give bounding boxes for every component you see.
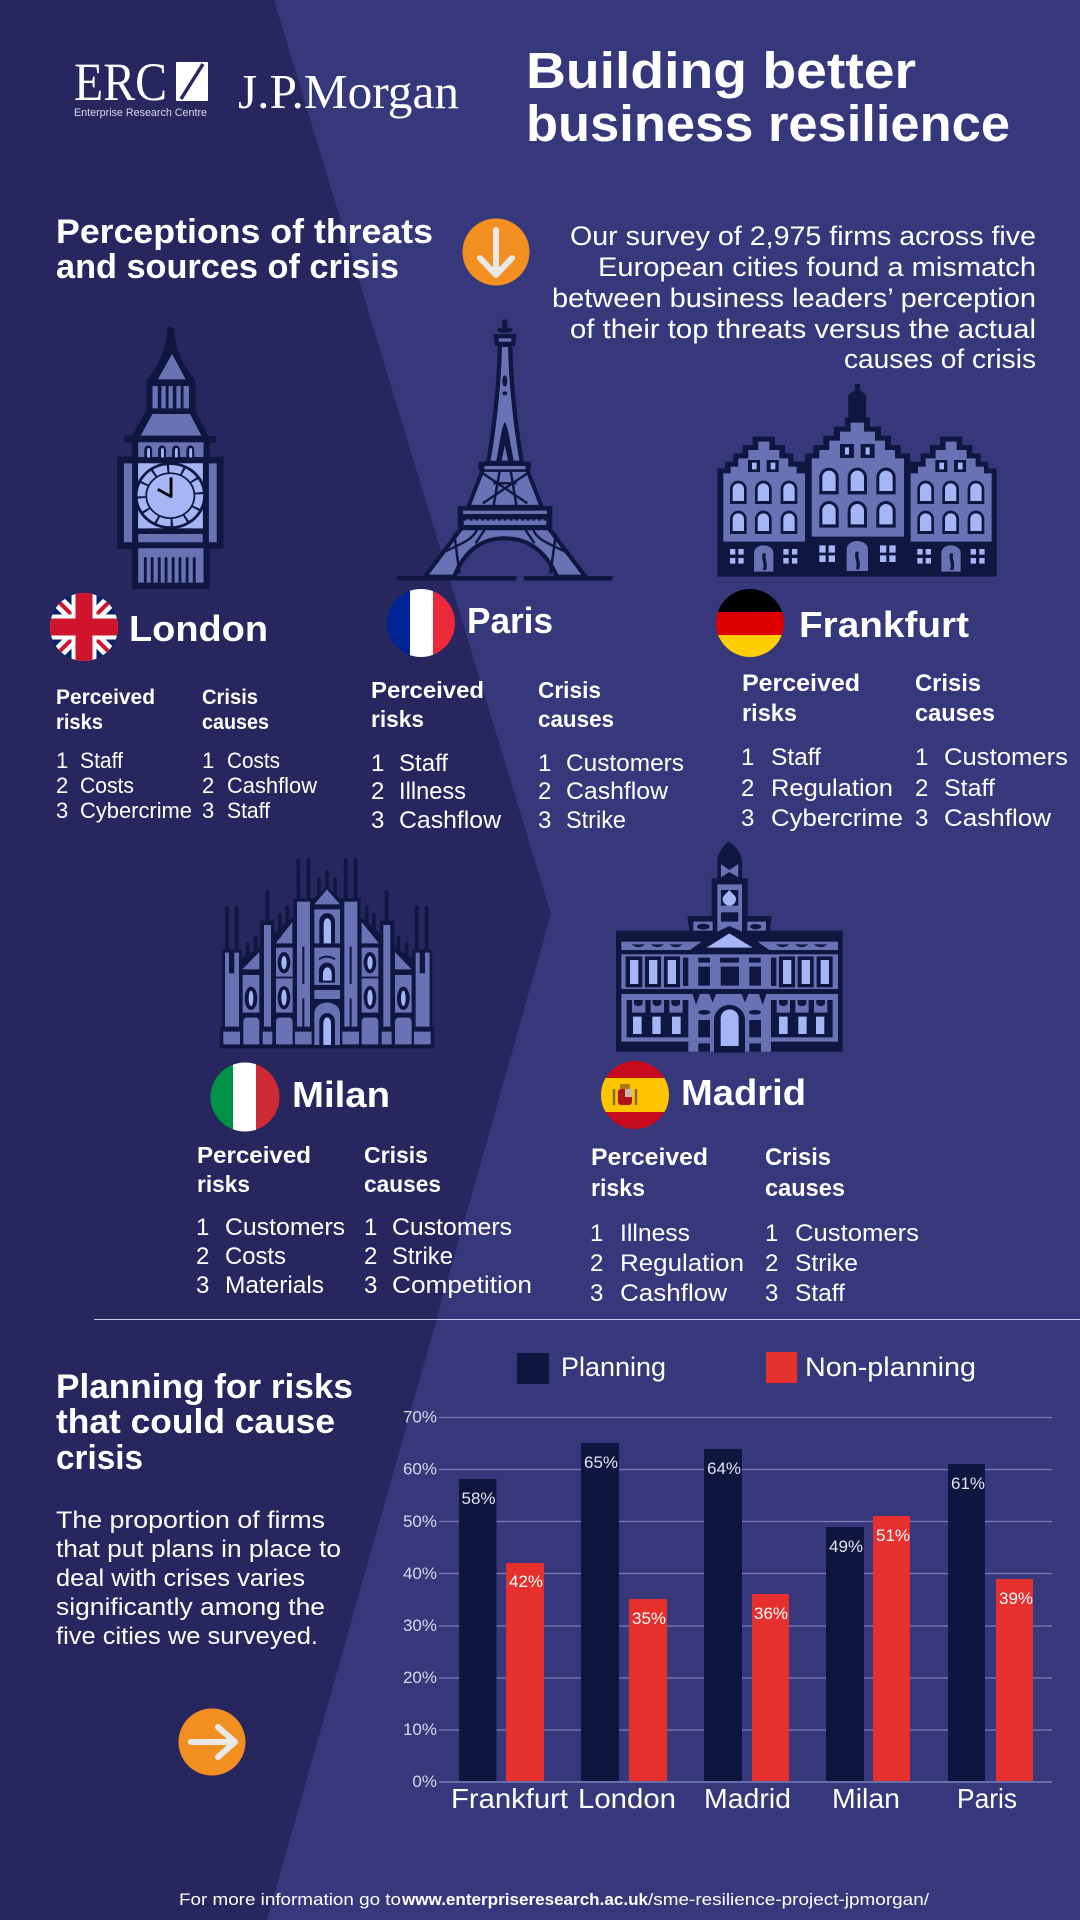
heading: perceived risks: Perceived: [56, 686, 155, 709]
list: crisis causes: 2: [364, 1243, 377, 1270]
panel: Paris: [371, 589, 684, 834]
list: crisis causes: 2: [915, 775, 928, 802]
city name: Madrid: Madrid: [681, 1072, 806, 1113]
survey intro text: Our survey of 2,975 firms across five: [570, 221, 1036, 251]
list: perceived risks: 2: [590, 1250, 603, 1277]
heading: perceptions of threats: [56, 213, 433, 286]
list: perceived risks: Regulation: [620, 1250, 744, 1277]
heading: crisis causes: Crisis: [202, 686, 258, 709]
heading: planning for risks: crisis: [56, 1439, 143, 1477]
list: crisis causes: 3: [915, 805, 928, 832]
list: perceived risks: 3: [371, 807, 384, 834]
heading: crisis causes: causes: [915, 700, 995, 727]
heading: crisis causes: causes: [364, 1171, 441, 1197]
planning description text: deal with crises varies: [56, 1565, 305, 1592]
list: crisis causes: 3: [364, 1272, 377, 1299]
panel: London: [50, 593, 317, 823]
heading: perceptions of threats: Perceptions of threats: [56, 213, 433, 251]
panel: Frankfurt: [716, 589, 1068, 832]
city name: Frankfurt: Frankfurt: [799, 604, 969, 645]
bars: London: 35%: [632, 1609, 666, 1628]
list: perceived risks: Cashflow: [620, 1280, 728, 1307]
dark chevron background panel: [0, 0, 551, 1920]
bars: Paris: 39%: [999, 1589, 1033, 1608]
list: crisis causes: Costs: [227, 748, 280, 773]
axis labels: 10%: [403, 1720, 437, 1739]
bars: Frankfurt: 58%: [461, 1489, 496, 1508]
list: crisis causes: [538, 750, 684, 834]
list: crisis causes: Customers: [944, 744, 1068, 771]
bars: London: [581, 1443, 667, 1781]
list: perceived risks: Staff: [771, 744, 821, 771]
list: crisis causes: Staff: [944, 775, 995, 802]
heading: crisis causes: Crisis: [765, 1144, 831, 1171]
bars: Milan: 49%: [829, 1537, 863, 1556]
heading: crisis causes: Crisis: [364, 1142, 428, 1168]
axis labels: 0%: [412, 1772, 437, 1791]
heading: planning for risks: [56, 1368, 353, 1477]
heading: planning for risks: that could cause: [56, 1403, 335, 1441]
list: crisis causes: Strike: [566, 807, 626, 834]
list: crisis causes: 1: [765, 1220, 778, 1247]
axis labels: 40%: [403, 1564, 437, 1583]
list: crisis causes: Cashflow: [944, 805, 1052, 832]
list: perceived risks: Cybercrime: [771, 805, 903, 832]
legend: Non-planning: [805, 1352, 976, 1382]
list: perceived risks: Costs: [80, 773, 134, 798]
list: perceived risks: 2: [196, 1243, 209, 1270]
bar chart: [403, 1408, 1052, 1814]
city axis labels: Paris: [957, 1783, 1017, 1814]
list: crisis causes: Strike: [795, 1250, 858, 1277]
icon: Eiffel Tower: [397, 319, 613, 581]
heading: crisis causes: Crisis: [915, 670, 981, 697]
heading: crisis causes: causes: [538, 706, 614, 732]
title: [526, 42, 1010, 152]
list: perceived risks: 1: [371, 750, 384, 777]
list: crisis causes: Staff: [795, 1280, 845, 1307]
heading: crisis causes: [202, 686, 269, 734]
planning description text: five cities we surveyed.: [56, 1623, 318, 1650]
list: perceived risks: Staff: [80, 748, 124, 773]
bars: Frankfurt: [459, 1479, 544, 1781]
logo: ERC: Enterprise Research Centre: [74, 107, 207, 119]
list: crisis causes: 2: [538, 778, 551, 805]
bars: Madrid: 64%: [707, 1459, 741, 1478]
bars: Milan: [826, 1516, 910, 1781]
list: crisis causes: Customers: [566, 750, 684, 777]
heading: crisis causes: [765, 1144, 845, 1202]
city axis labels: London: [578, 1783, 676, 1814]
heading: planning for risks: Planning for risks: [56, 1368, 353, 1406]
list: perceived risks: 1: [590, 1220, 603, 1247]
city axis labels: [451, 1783, 1017, 1814]
bars: London: 65%: [584, 1453, 618, 1472]
survey intro text: European cities found a mismatch: [598, 252, 1036, 282]
footer: [179, 1890, 929, 1909]
footer: www.enterpriseresearch.ac.uk: [401, 1890, 649, 1909]
heading: perceived risks: risks: [742, 700, 797, 727]
planning description text: [56, 1507, 341, 1650]
heading: perceived risks: risks: [371, 706, 424, 732]
footer: For more information go to: [179, 1890, 401, 1909]
planning description text: that put plans in place to: [56, 1536, 341, 1563]
list: perceived risks: 1: [741, 744, 754, 771]
flag: France: [387, 589, 456, 657]
heading: perceived risks: [371, 677, 484, 732]
list: perceived risks: [590, 1220, 744, 1307]
heading: perceived risks: risks: [197, 1171, 250, 1197]
list: perceived risks: 1: [56, 748, 68, 773]
list: crisis causes: 1: [538, 750, 551, 777]
list: perceived risks: 3: [741, 805, 754, 832]
heading: crisis causes: [915, 670, 995, 727]
list: crisis causes: 3: [538, 807, 551, 834]
list: perceived risks: Cashflow: [399, 807, 502, 834]
list: crisis causes: 1: [915, 744, 928, 771]
list: perceived risks: 1: [196, 1214, 209, 1241]
survey intro text: [552, 221, 1036, 374]
city name: Paris: Paris: [467, 600, 553, 641]
list: perceived risks: Costs: [225, 1243, 286, 1270]
axis labels: 20%: [403, 1668, 437, 1687]
heading: perceived risks: risks: [591, 1175, 645, 1202]
list: crisis causes: Cashflow: [566, 778, 669, 805]
list: crisis causes: 2: [202, 773, 214, 798]
heading: perceived risks: [591, 1144, 708, 1202]
heading: crisis causes: [364, 1142, 441, 1197]
city axis labels: Madrid: [704, 1783, 791, 1814]
survey intro text: causes of crisis: [844, 344, 1036, 374]
list: perceived risks: 2: [371, 778, 384, 805]
icon: Madrid city hall: [616, 842, 843, 1053]
list: perceived risks: 2: [56, 773, 68, 798]
heading: perceived risks: [197, 1142, 311, 1197]
icon: down arrow: [462, 218, 530, 286]
heading: perceived risks: [56, 686, 155, 734]
heading: crisis causes: causes: [765, 1175, 845, 1202]
axis labels: 50%: [403, 1512, 437, 1531]
heading: perceived risks: Perceived: [591, 1144, 708, 1171]
axis labels: 30%: [403, 1616, 437, 1635]
bars: Madrid: 36%: [754, 1604, 788, 1623]
list: perceived risks: [56, 748, 192, 823]
heading: crisis causes: Crisis: [538, 677, 601, 703]
list: crisis causes: 3: [202, 798, 214, 823]
list: perceived risks: 3: [196, 1272, 209, 1299]
list: perceived risks: Cybercrime: [80, 798, 192, 823]
heading: crisis causes: causes: [202, 711, 269, 734]
list: perceived risks: 3: [590, 1280, 603, 1307]
heading: perceptions of threats: and sources of crisis: [56, 248, 399, 286]
list: crisis causes: 2: [765, 1250, 778, 1277]
list: perceived risks: Illness: [399, 778, 466, 805]
panel: Madrid: [590, 1061, 919, 1307]
flag: United Kingdom: [50, 593, 118, 661]
icon: Milan cathedral: [220, 860, 434, 1048]
list: crisis causes: [364, 1214, 532, 1299]
list: perceived risks: Staff: [399, 750, 448, 777]
icon: Frankfurt Romer: [717, 384, 997, 577]
list: crisis causes: [202, 748, 317, 823]
city name: London: London: [129, 608, 268, 649]
heading: perceived risks: Perceived: [197, 1142, 311, 1168]
bars: Madrid: [704, 1449, 789, 1781]
bars: Milan: 51%: [876, 1526, 910, 1545]
city axis labels: Frankfurt: [451, 1783, 568, 1814]
list: perceived risks: 2: [741, 775, 754, 802]
list: perceived risks: [741, 744, 903, 832]
city axis labels: Milan: [832, 1783, 900, 1814]
list: crisis causes: Cashflow: [227, 773, 317, 798]
icon: right arrow: [178, 1708, 246, 1776]
planning description text: The proportion of firms: [56, 1507, 325, 1534]
list: crisis causes: 3: [765, 1280, 778, 1307]
logo: J.P.Morgan: J.P.Morgan: [238, 64, 459, 119]
heading: perceived risks: Perceived: [371, 677, 484, 703]
heading: perceived risks: Perceived: [742, 670, 860, 697]
list: perceived risks: 3: [56, 798, 68, 823]
flag: Italy: [210, 1062, 280, 1132]
list: crisis causes: Strike: [392, 1243, 453, 1270]
axis labels: [403, 1408, 437, 1791]
list: perceived risks: Materials: [225, 1272, 324, 1299]
title: business resilience: [526, 95, 1010, 152]
list: perceived risks: Regulation: [771, 775, 893, 802]
list: perceived risks: Illness: [620, 1220, 690, 1247]
planning description text: significantly among the: [56, 1594, 325, 1621]
list: crisis causes: Competition: [392, 1272, 532, 1299]
title: Building better: [526, 42, 916, 99]
list: crisis causes: Staff: [227, 798, 271, 823]
logo: ERC: ERC: [74, 52, 167, 112]
list: crisis causes: [915, 744, 1068, 832]
axis labels: 60%: [403, 1460, 437, 1478]
list: crisis causes: Customers: [795, 1220, 919, 1247]
list: perceived risks: Customers: [225, 1214, 345, 1241]
list: crisis causes: 1: [202, 748, 214, 773]
survey intro text: of their top threats versus the actual: [570, 314, 1036, 344]
heading: perceived risks: [742, 670, 860, 727]
flag: Spain: [601, 1061, 669, 1129]
survey intro text: between business leaders’ perception: [552, 283, 1036, 313]
list: perceived risks: [371, 750, 502, 834]
heading: crisis causes: [538, 677, 614, 732]
bars: Frankfurt: 42%: [509, 1572, 543, 1591]
flag: Germany: [716, 589, 784, 658]
bars: Paris: [948, 1464, 1033, 1781]
axis labels: 70%: [403, 1408, 437, 1426]
list: crisis causes: [765, 1220, 919, 1307]
icon: Big Ben: [118, 327, 223, 588]
heading: perceived risks: risks: [56, 711, 103, 734]
list: crisis causes: 1: [364, 1214, 377, 1241]
legend: Planning: [561, 1352, 666, 1382]
legend: [517, 1352, 976, 1384]
list: crisis causes: Customers: [392, 1214, 512, 1241]
list: perceived risks: [196, 1214, 345, 1299]
footer: /sme-resilience-project-jpmorgan/: [648, 1890, 929, 1909]
panel: Milan: [196, 1062, 532, 1299]
bars: Paris: 61%: [951, 1474, 985, 1493]
city name: Milan: Milan: [292, 1074, 390, 1115]
